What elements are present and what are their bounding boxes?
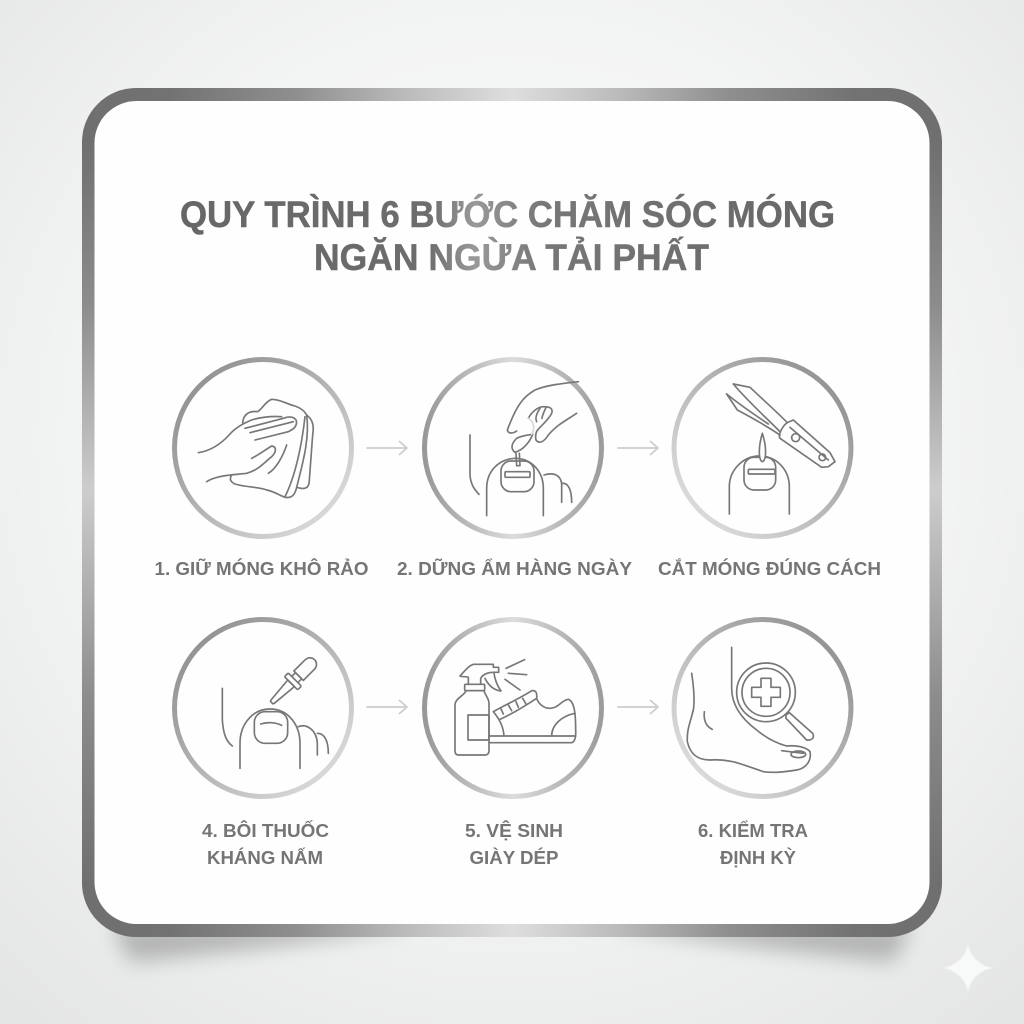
step 4: apply antifungal bbox=[174, 620, 352, 796]
step 5 label: GIÀY DÉP bbox=[470, 847, 558, 868]
arrow 1 to 2 bbox=[367, 442, 407, 454]
card panel bbox=[94, 101, 930, 924]
step 4 label: 4. BÔI THUỐC bbox=[202, 820, 329, 841]
icon: hand applying cream on nail bbox=[470, 382, 578, 516]
title bbox=[180, 193, 835, 278]
icon: spray bottle and shoe bbox=[455, 660, 576, 755]
icon: foot and magnifier with cross bbox=[687, 647, 813, 772]
step 3: cut nails correctly bbox=[674, 360, 851, 536]
step 4 label bbox=[202, 820, 329, 868]
step 1: keep nails dry bbox=[174, 360, 352, 536]
icon: hand drying with towel bbox=[198, 399, 313, 498]
step 6 label: ĐỊNH KỲ bbox=[720, 847, 796, 868]
step 3 label: CẮT MÓNG ĐÚNG CÁCH bbox=[658, 558, 881, 579]
step 5: clean shoes bbox=[424, 620, 602, 796]
card frame bbox=[82, 88, 942, 937]
title: NGĂN NGỪA TẢI PHẤT bbox=[314, 236, 709, 278]
step 1 label: 1. GIỮ MÓNG KHÔ RẢO bbox=[154, 558, 368, 579]
arrow 4 to 5 bbox=[367, 700, 407, 714]
icon: dropper over toe bbox=[222, 653, 328, 768]
arrow 5 to 6 bbox=[618, 700, 658, 714]
step 6 label bbox=[698, 820, 808, 868]
sparkle watermark bbox=[944, 944, 992, 992]
step 5 label: 5. VỆ SINH bbox=[465, 820, 563, 841]
icon: nail clipper and toe bbox=[727, 384, 835, 514]
step 2 label: 2. DỮNG ẨM HÀNG NGÀY bbox=[397, 558, 632, 579]
card shadow bbox=[112, 925, 912, 962]
step 5 label bbox=[465, 820, 563, 868]
step 4 label: KHÁNG NẤM bbox=[207, 847, 323, 868]
step 6: regular check-up bbox=[674, 620, 851, 796]
step 2: daily moisturising bbox=[424, 360, 602, 536]
title: QUY TRÌNH 6 BƯỚC CHĂM SÓC MÓNG bbox=[180, 193, 835, 235]
arrow 2 to 3 bbox=[618, 442, 658, 454]
step 6 label: 6. KIỂM TRA bbox=[698, 820, 808, 841]
